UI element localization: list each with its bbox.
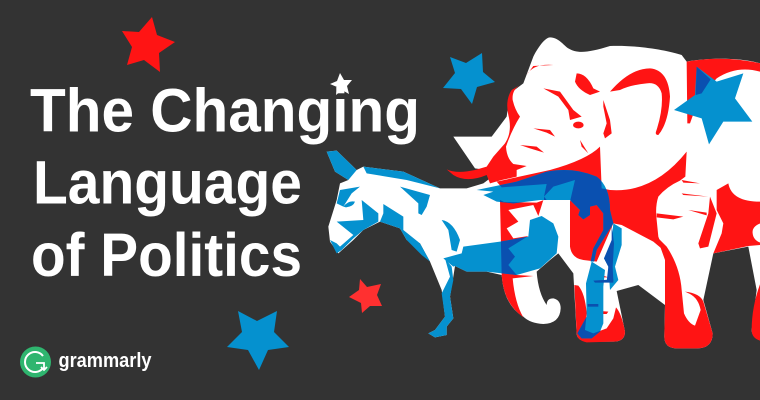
blue donkey markings xyxy=(327,151,622,338)
dark blue tail stripes on donkey leg xyxy=(588,225,614,307)
illustration: elephant and donkey xyxy=(327,37,760,348)
white silhouettes of elephant and donkey xyxy=(327,37,760,348)
title xyxy=(30,76,420,289)
star overlap on red xyxy=(696,67,711,95)
red elephant markings xyxy=(447,59,760,348)
title: of Politics xyxy=(31,221,302,289)
title: Language xyxy=(33,148,302,216)
star on elephant xyxy=(674,67,752,144)
icon: green G circle xyxy=(20,346,51,378)
star: small white xyxy=(330,73,352,95)
grammarly logo xyxy=(20,346,152,378)
star: red top xyxy=(122,17,175,72)
dark blue overlap of donkey and elephant xyxy=(500,170,614,338)
title: The Changing xyxy=(30,76,420,144)
wordmark: grammarly xyxy=(58,350,152,372)
star: blue top xyxy=(443,53,495,104)
star: blue bottom xyxy=(227,311,289,370)
star: small red xyxy=(349,279,382,313)
